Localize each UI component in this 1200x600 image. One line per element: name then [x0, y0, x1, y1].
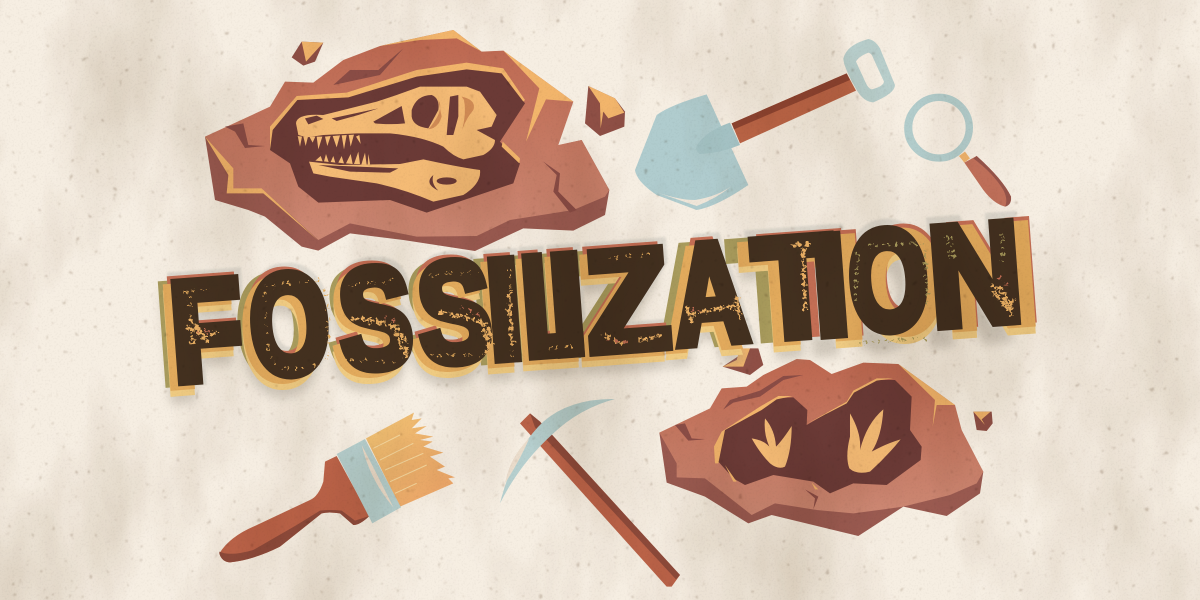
shovel icon [635, 39, 895, 210]
title light halo: N [924, 189, 1027, 354]
title olive layer: T [725, 206, 816, 371]
title yellow layer: O [236, 254, 327, 418]
title yellow layer: S [405, 241, 490, 405]
title yellow layer: L [510, 235, 581, 397]
title drop shadow: I [536, 242, 583, 403]
title salmon layer: A [663, 209, 748, 373]
title tan layer: Z [573, 224, 666, 388]
fossil rock with footprints [659, 348, 993, 536]
title olive layer: S [322, 238, 407, 402]
title weathered speckles [186, 235, 1012, 370]
title dark face [165, 192, 1027, 412]
title light halo: S [333, 233, 418, 397]
title dark face: T [749, 204, 840, 369]
title tan layer: T [738, 209, 829, 374]
title drop shadow: I [473, 247, 520, 408]
title drop shadow: N [916, 210, 1019, 375]
rock chip under title [723, 348, 763, 375]
title olive layer: A [651, 214, 736, 378]
title yellow layer: Z [573, 230, 666, 394]
title tan layer: O [236, 248, 327, 412]
title yellow layer: A [658, 223, 743, 387]
title yellow layer: T [738, 215, 829, 380]
title dark face: S [412, 230, 497, 394]
title drop shadow: S [404, 248, 489, 412]
title salmon layer: N [940, 190, 1043, 355]
title tan layer [157, 194, 1042, 417]
title light halo: S [412, 227, 497, 391]
title tan layer: S [326, 241, 411, 405]
title tan layer: I [474, 234, 521, 395]
magnifying glass icon [905, 97, 1011, 207]
title dark face: F [165, 248, 248, 412]
title: FOSSILIZATION [152, 189, 1043, 430]
fossil rock with dinosaur skull [205, 30, 625, 251]
skull upper jaw [296, 87, 497, 159]
title drop shadow: Z [573, 237, 666, 401]
title dark face: A [668, 212, 753, 376]
title dark face: N [924, 192, 1027, 357]
title tan layer: O [858, 201, 949, 365]
title salmon layer: O [859, 197, 950, 361]
rock chip right [585, 86, 625, 136]
title light halo: Z [581, 216, 674, 380]
title light halo: T [749, 201, 840, 366]
title drop shadow: L [508, 242, 579, 404]
paintbrush icon [219, 413, 455, 562]
title light halo: A [668, 209, 753, 373]
title yellow layer: S [326, 247, 411, 411]
title drop shadow: A [660, 230, 745, 394]
title olive layer: I [532, 226, 579, 387]
title dark face: I [807, 205, 854, 366]
title tan layer: N [939, 194, 1042, 359]
title dark face: I [544, 224, 591, 385]
title salmon layer: S [329, 233, 414, 397]
title light halo: O [843, 196, 934, 360]
title salmon layer: I [477, 226, 524, 387]
title drop shadow [157, 210, 1019, 430]
title yellow layer [157, 201, 1042, 423]
title yellow layer: N [939, 201, 1042, 366]
title dark face: Z [581, 219, 674, 383]
title tan layer: S [405, 235, 490, 399]
title yellow layer: O [858, 208, 949, 372]
left footprint [752, 418, 792, 468]
title olive layer: L [504, 226, 575, 388]
title yellow layer: I [538, 235, 585, 396]
title olive layer: I [467, 231, 514, 392]
rock chip top left [292, 42, 323, 66]
title light halo [165, 189, 1027, 409]
title drop shadow: O [236, 261, 327, 425]
rock chip far right [973, 412, 993, 431]
title tan layer: F [157, 253, 240, 417]
title dark face: O [843, 199, 934, 363]
title dark face: O [244, 243, 335, 407]
title light halo: L [516, 221, 587, 383]
title salmon layer [161, 190, 1043, 409]
title salmon layer: T [757, 201, 848, 366]
title olive layer [152, 206, 816, 414]
title light halo: I [544, 221, 591, 382]
title light halo: F [165, 245, 248, 409]
title salmon layer: F [161, 245, 244, 409]
title dark face: S [333, 236, 418, 400]
title dark face: L [516, 224, 587, 386]
skull lower jaw [309, 152, 480, 202]
title yellow layer: F [157, 259, 240, 423]
title tan layer: L [510, 229, 581, 391]
title tan layer: I [822, 207, 869, 368]
title light halo: O [244, 240, 335, 404]
pickaxe icon [500, 399, 680, 587]
title yellow layer: I [822, 214, 869, 375]
title tan layer: I [538, 229, 585, 390]
title salmon layer: L [512, 221, 583, 383]
title salmon layer: I [540, 221, 587, 382]
title salmon layer: I [823, 203, 870, 364]
title salmon layer: Z [576, 216, 669, 380]
title drop shadow: F [157, 266, 240, 430]
title dark face: I [481, 229, 528, 390]
title drop shadow: T [741, 222, 832, 387]
title drop shadow: I [799, 223, 846, 384]
title olive layer: S [401, 232, 486, 396]
title drop shadow: O [835, 217, 926, 381]
title tan layer: A [658, 217, 743, 381]
title olive layer: F [152, 250, 235, 414]
title light halo: I [481, 226, 528, 387]
title light halo: I [807, 202, 854, 363]
right footprint [847, 409, 901, 473]
title salmon layer: S [408, 227, 493, 391]
title salmon layer: O [240, 240, 331, 404]
title drop shadow: S [325, 254, 410, 418]
title olive layer: Z [566, 221, 659, 385]
title olive layer: O [231, 245, 322, 409]
title yellow layer: I [474, 240, 521, 401]
